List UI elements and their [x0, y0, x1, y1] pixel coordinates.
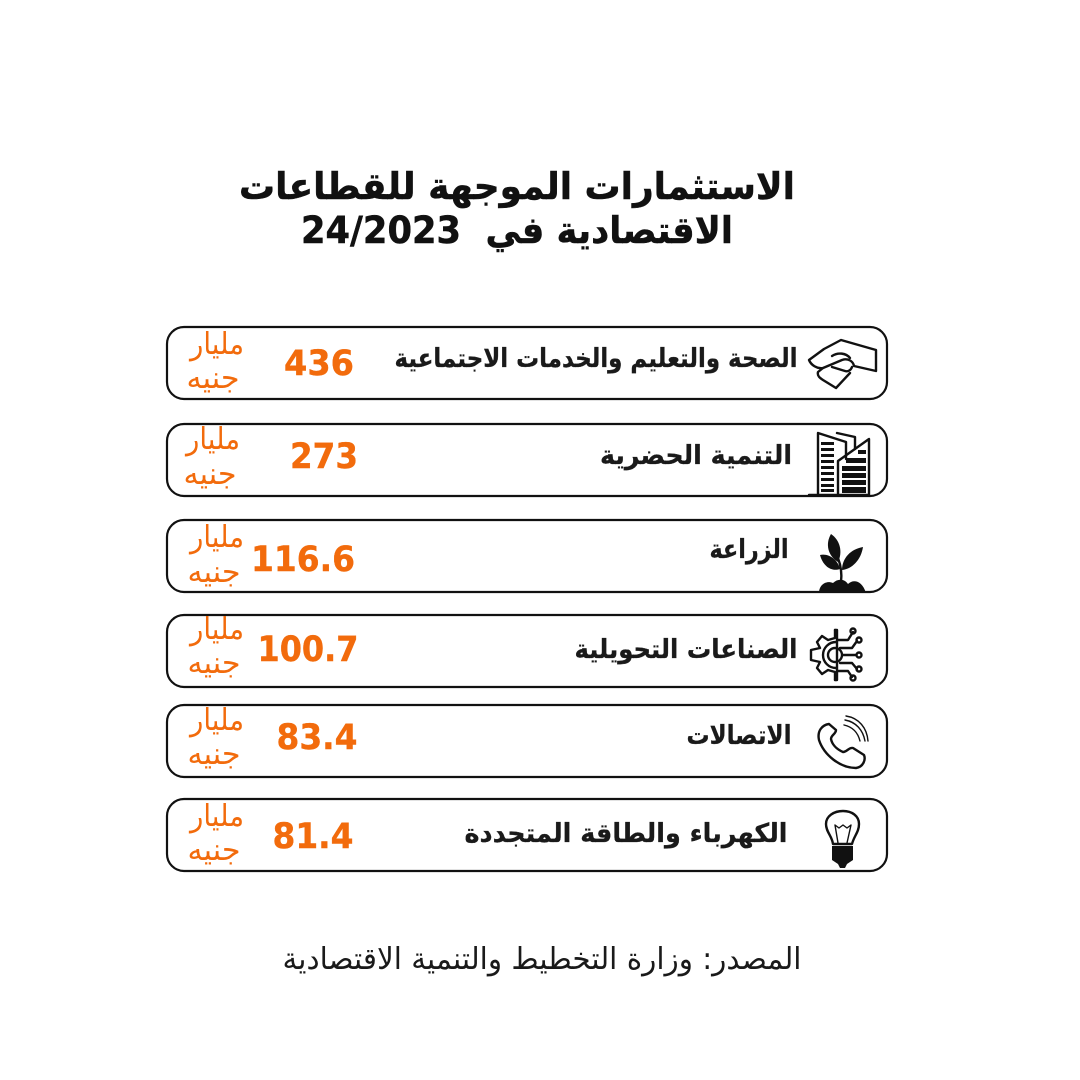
- panel: urban development: [167, 422, 887, 496]
- icon: plant: [819, 534, 866, 593]
- unit: [188, 703, 244, 772]
- icon: gear with circuit: [811, 628, 862, 680]
- label: الكهرباء والطاقة المتجددة: [464, 819, 788, 849]
- panel: electricity and renewable energy: [167, 799, 887, 871]
- title: الاقتصادية في 24/2023: [301, 209, 733, 252]
- unit: [186, 327, 244, 396]
- unit: [188, 520, 244, 590]
- panel: telecommunications: [167, 703, 887, 777]
- label: الصحة والتعليم والخدمات الاجتماعية: [394, 344, 798, 374]
- unit: جنيه: [188, 833, 240, 868]
- label: التنمية الحضرية: [600, 441, 792, 471]
- icon: light bulb: [826, 811, 859, 868]
- label: الصناعات التحويلية: [574, 635, 798, 665]
- unit: [188, 612, 244, 681]
- value: 436: [284, 344, 354, 384]
- unit: جنيه: [188, 737, 240, 772]
- unit: مليار: [184, 422, 240, 457]
- icon: phone with signal: [819, 716, 868, 768]
- label: الزراعة: [710, 535, 788, 565]
- source note: المصدر: وزارة التخطيط والتنمية الاقتصادية: [282, 942, 802, 977]
- panel: health, education and social services: [167, 327, 887, 399]
- value: 83.4: [276, 718, 358, 758]
- unit: مليار: [188, 612, 244, 647]
- value: 273: [290, 437, 358, 477]
- unit: جنيه: [186, 361, 240, 396]
- value: 116.6: [251, 540, 355, 580]
- title: الاستثمارات الموجهة للقطاعات: [239, 165, 795, 208]
- unit: مليار: [188, 520, 244, 555]
- unit: جنيه: [188, 555, 240, 590]
- icon: buildings: [809, 433, 869, 495]
- unit: جنيه: [184, 457, 236, 492]
- value: 100.7: [258, 630, 358, 670]
- unit: جنيه: [188, 646, 240, 681]
- icon: hand holding heart: [809, 340, 876, 388]
- panel: manufacturing industries: [167, 612, 887, 687]
- panel: agriculture: [167, 520, 887, 593]
- unit: مليار: [188, 799, 244, 834]
- title: [239, 165, 795, 252]
- label: الاتصالات: [686, 721, 792, 751]
- unit: مليار: [188, 703, 244, 738]
- value: 81.4: [272, 817, 354, 857]
- unit: [184, 422, 240, 492]
- unit: [188, 799, 244, 868]
- unit: مليار: [188, 327, 244, 362]
